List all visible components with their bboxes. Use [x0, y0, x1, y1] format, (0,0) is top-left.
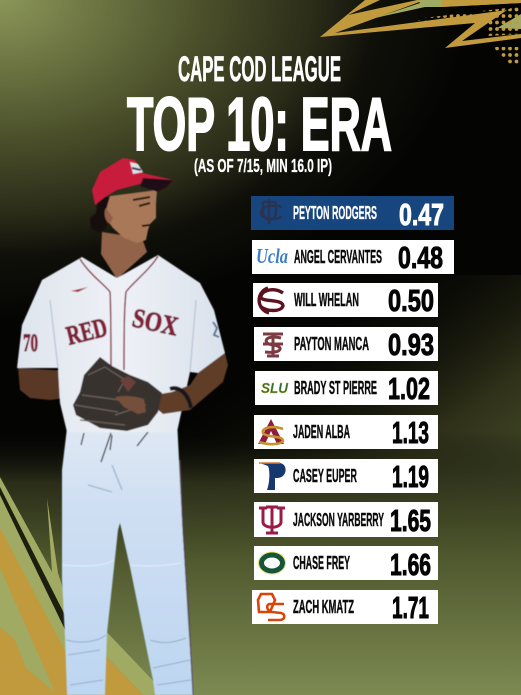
row 6: Jaden Alba: 1.13	[392, 415, 429, 450]
neck	[101, 232, 147, 279]
icon: Indiana logo	[259, 507, 285, 533]
row 6: Jaden Alba: JADEN ALBA	[293, 422, 350, 442]
row 2: Angel Cervantes: 0.48	[398, 240, 443, 275]
row 3: Will Whelan: 0.50	[388, 283, 434, 318]
icon: Oregon logo	[258, 552, 286, 574]
icon: Arizona State logo	[258, 419, 284, 444]
row 5: Brady St Pierre	[255, 371, 438, 406]
icon: Oregon State logo	[258, 594, 284, 620]
icon: South Carolina logo	[259, 288, 283, 313]
cap	[92, 158, 173, 205]
row 8: Jackson Yarberry	[254, 502, 438, 538]
left forearm	[18, 368, 86, 400]
title	[127, 50, 392, 176]
icon: Florida State logo	[263, 333, 283, 357]
row 7: Casey Euper: CASEY EUPER	[293, 466, 357, 486]
facial features	[133, 197, 150, 226]
leaderboard	[251, 196, 454, 625]
row 1: Peyton Rodgers: 0.47	[399, 197, 444, 232]
jersey lettering: 70	[23, 330, 38, 357]
row 1: Peyton Rodgers	[251, 196, 454, 232]
icon: SLU logo: SLU	[261, 380, 289, 397]
jersey lettering	[23, 303, 181, 357]
glove	[73, 357, 162, 431]
row 10: Zach Kmatz	[252, 590, 438, 625]
jersey	[17, 255, 225, 432]
row 4: Payton Manca: 0.93	[388, 327, 434, 362]
hair	[90, 197, 122, 233]
row 7: Casey Euper: 1.19	[392, 459, 429, 494]
row 7: Casey Euper	[254, 459, 438, 494]
row 4: Payton Manca: PAYTON MANCA	[294, 334, 369, 354]
row 2: Angel Cervantes	[252, 240, 454, 275]
row 3: Will Whelan: WILL WHELAN	[294, 290, 359, 310]
icon: UCLA logo: Ucla	[256, 244, 288, 268]
row 4: Payton Manca	[254, 327, 438, 362]
row 9: Chase Frey: CHASE FREY	[293, 553, 350, 573]
row 1: Peyton Rodgers: PEYTON RODGERS	[293, 203, 377, 223]
pants	[62, 420, 193, 695]
face	[106, 190, 157, 243]
row 2: Angel Cervantes: ANGEL CERVANTES	[294, 247, 382, 267]
top right lightning graphic	[320, 0, 521, 64]
right arm	[143, 353, 228, 414]
row 9: Chase Frey	[254, 546, 438, 582]
row 5: Brady St Pierre: 1.02	[388, 371, 430, 406]
row 9: Chase Frey: 1.66	[390, 547, 431, 582]
title: CAPE COD LEAGUE	[178, 50, 341, 89]
wristband	[170, 388, 191, 408]
icon: UC logo	[261, 199, 282, 224]
jersey lettering: RED	[63, 312, 110, 351]
icon: Pepperdine logo	[259, 463, 286, 490]
row 6: Jaden Alba	[254, 415, 438, 450]
row 3: Will Whelan	[253, 283, 438, 318]
bottom left lightning graphic	[0, 477, 160, 695]
row 5: Brady St Pierre: BRADY ST PIERRE	[294, 378, 377, 398]
row 8: Jackson Yarberry: 1.65	[390, 503, 431, 538]
qualifier subheading: (AS OF 7/15, MIN 16.0 IP)	[194, 156, 332, 176]
jersey lettering: SOX	[130, 303, 181, 342]
player photo illustration	[17, 158, 228, 695]
row 10: Zach Kmatz: ZACH KMATZ	[293, 597, 354, 617]
row 10: Zach Kmatz: 1.71	[392, 590, 429, 625]
row 8: Jackson Yarberry: JACKSON YARBERRY	[293, 510, 384, 530]
